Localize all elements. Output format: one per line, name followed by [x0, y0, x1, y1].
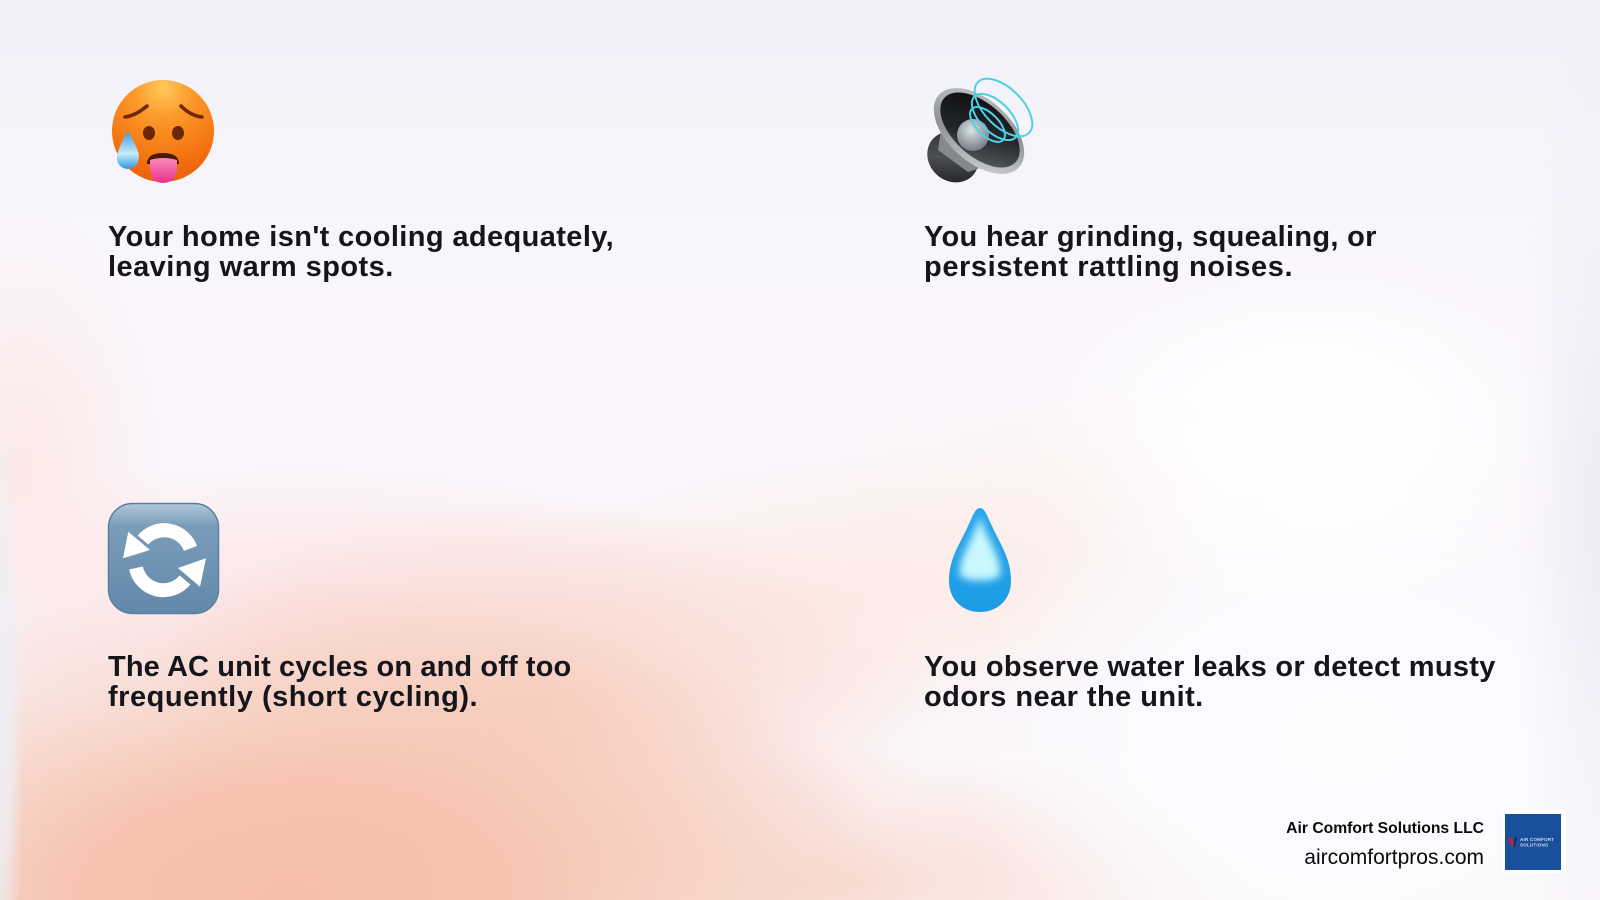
text block: leak sign [924, 651, 1496, 713]
text block: noise sign [924, 221, 1377, 283]
text block: cooling sign: leaving warm spots. [108, 251, 394, 283]
logo: Air Comfort Solutions badge [1501, 809, 1566, 873]
logo: Air Comfort Solutions badge: SOLUTIONS [1520, 842, 1548, 848]
icon: hot face [112, 80, 214, 183]
text block: noise sign: persistent rattling noises. [924, 251, 1293, 283]
text block: cooling sign [108, 221, 614, 283]
logo: Air Comfort Solutions badge: AIR COMFORT [1520, 837, 1554, 842]
brand website: aircomfortpros.com [1304, 846, 1484, 869]
icon: speaker with sound waves [917, 69, 1042, 193]
text block: leak sign: You observe water leaks or detect musty [924, 651, 1496, 683]
text block: cooling sign: Your home isn't cooling adequately, [108, 221, 614, 253]
icon: water droplet [949, 508, 1011, 612]
text block: short cycling sign [108, 651, 571, 713]
text block: leak sign: odors near the unit. [924, 681, 1204, 713]
text block: short cycling sign: frequently (short cycling). [108, 681, 478, 713]
brand name: Air Comfort Solutions LLC [1286, 820, 1484, 837]
icon: counterclockwise arrows button [108, 504, 218, 614]
text block: noise sign: You hear grinding, squealing, or [924, 221, 1377, 253]
text block: short cycling sign: The AC unit cycles on and off too [108, 651, 571, 683]
